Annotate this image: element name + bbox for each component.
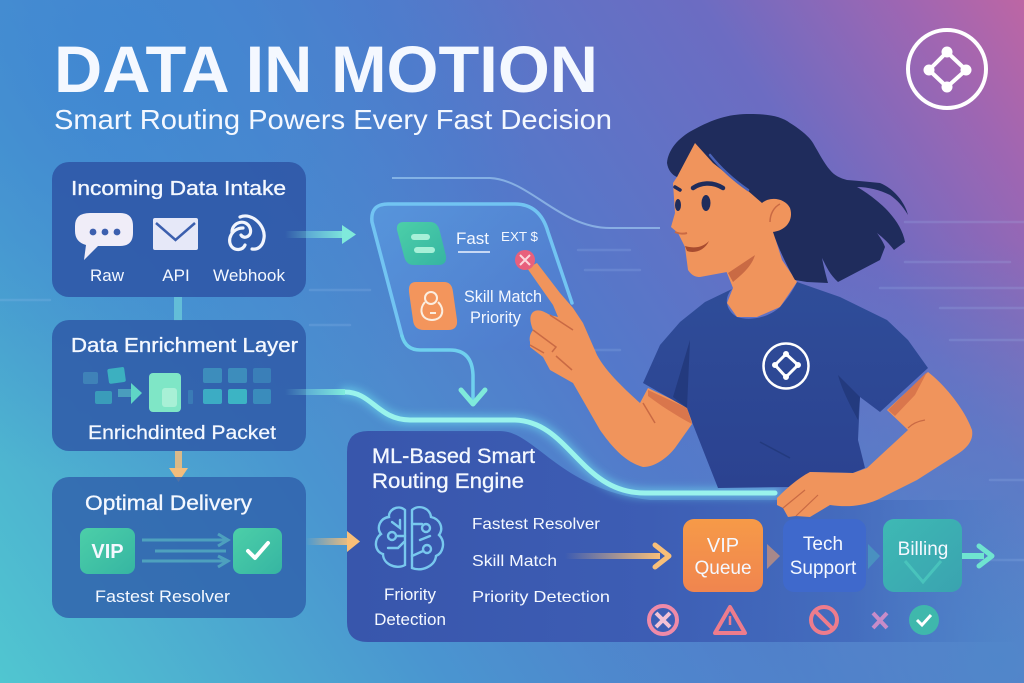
arrow: delivery to engine (306, 531, 360, 552)
neck (725, 228, 797, 317)
icon: enriched packet card (149, 373, 181, 412)
icon: logo top right (908, 30, 986, 108)
heading: ML engine: ML-Based Smart (372, 445, 535, 468)
mouth (685, 241, 709, 252)
thin decorative flow curve (392, 178, 660, 228)
queue: tech support: Support (790, 558, 857, 579)
arrow: engine to queues (565, 545, 669, 567)
label: raw: Raw (90, 266, 125, 285)
icon: check badge (233, 528, 282, 574)
body crease (760, 442, 790, 458)
icon: warning (715, 607, 745, 633)
list: routing criteria: Fastest Resolver (472, 516, 601, 533)
panel: data enrichment layer (52, 320, 306, 451)
finger creases (530, 315, 655, 423)
flow line: enrichment to queues (285, 389, 775, 493)
face (671, 140, 790, 277)
queue: billing: Billing (898, 539, 948, 560)
label: webhook: Webhook (213, 266, 285, 285)
list: routing criteria: Skill Match (472, 553, 557, 570)
icon: webhook swirl (230, 216, 264, 249)
icon: chat bubble (75, 213, 133, 260)
label: api: API (162, 266, 190, 285)
label: skill match: Skill Match (464, 287, 542, 306)
panel: ML routing engine (347, 431, 1024, 642)
panel: optimal delivery (52, 477, 306, 618)
icon: packet grid (188, 368, 271, 404)
icon: x mark (873, 613, 887, 628)
queue: VIP: VIP (707, 535, 739, 557)
icon: orange tile (409, 282, 457, 330)
eyebrow (693, 183, 723, 188)
label: priority: Priority (470, 308, 521, 327)
panel: incoming data intake (52, 162, 306, 297)
panel: ML routing engine: Routing Engine (372, 470, 524, 493)
motion lines (0, 222, 1024, 560)
queue: billing (883, 519, 962, 592)
icon: shirt logo (764, 344, 808, 388)
title: DATA IN MOTION (54, 32, 598, 106)
heading: enrichment: Data Enrichment Layer (71, 335, 298, 357)
icon: green tile (397, 222, 446, 265)
icon: brain (376, 507, 443, 569)
hair (667, 114, 908, 283)
underline (458, 251, 490, 253)
queue: VIP (683, 519, 763, 592)
pointing arm and hand (527, 263, 692, 467)
label: friority detection: Friority (384, 585, 436, 604)
icon: envelope (153, 218, 198, 250)
elbow shadow (648, 390, 692, 424)
arrows: vip to check (142, 534, 228, 567)
ear (762, 199, 791, 232)
list: routing criteria (472, 516, 610, 606)
heading: delivery: Optimal Delivery (85, 492, 253, 515)
subtitle: Smart Routing Powers Every Fast Decision (54, 104, 612, 135)
chevron (868, 544, 880, 569)
nose shadow (675, 232, 687, 234)
supporting arm and hand (777, 372, 972, 517)
hair highlight (710, 155, 748, 190)
label: fast: Fast (456, 229, 489, 248)
icon: raw data fragments (83, 367, 142, 404)
icon: x circle (649, 606, 677, 634)
label: fastest resolver: Fastest Resolver (95, 587, 230, 606)
icon: vip badge (80, 528, 135, 574)
icon: check circle (909, 605, 939, 635)
status icons (649, 605, 939, 635)
icon: prohibited (811, 607, 837, 633)
connector: intake to enrichment (174, 297, 182, 321)
neck shadow (728, 255, 755, 282)
outline with down arrow (372, 204, 572, 404)
arrow: intake to panel (285, 225, 356, 244)
queue: VIP: Queue (694, 558, 752, 579)
illustration: woman pointing (515, 114, 972, 517)
list: routing criteria: Priority Detection (472, 589, 610, 606)
icon: vip badge: VIP (91, 541, 124, 563)
chevron (767, 544, 780, 569)
heading: intake: Incoming Data Intake (71, 178, 286, 200)
shirt folds (673, 340, 860, 420)
connector: enrichment to delivery (169, 451, 188, 482)
ear line (770, 204, 780, 222)
panel: touch UI card (372, 204, 572, 404)
queue: tech support: Tech (803, 534, 843, 555)
queue: tech support (783, 519, 866, 592)
label: enriched packet: Enrichdinted Packet (88, 423, 277, 444)
label: ext: EXT $ (501, 229, 539, 244)
arrow: billing exit (962, 546, 992, 566)
far eyebrow (675, 187, 680, 190)
panel: ML routing engine: Detection (374, 610, 446, 629)
far eye (675, 199, 681, 211)
icon: red touch point (515, 250, 535, 270)
eye (702, 195, 710, 211)
arm details (888, 372, 927, 416)
shirt (643, 282, 928, 488)
